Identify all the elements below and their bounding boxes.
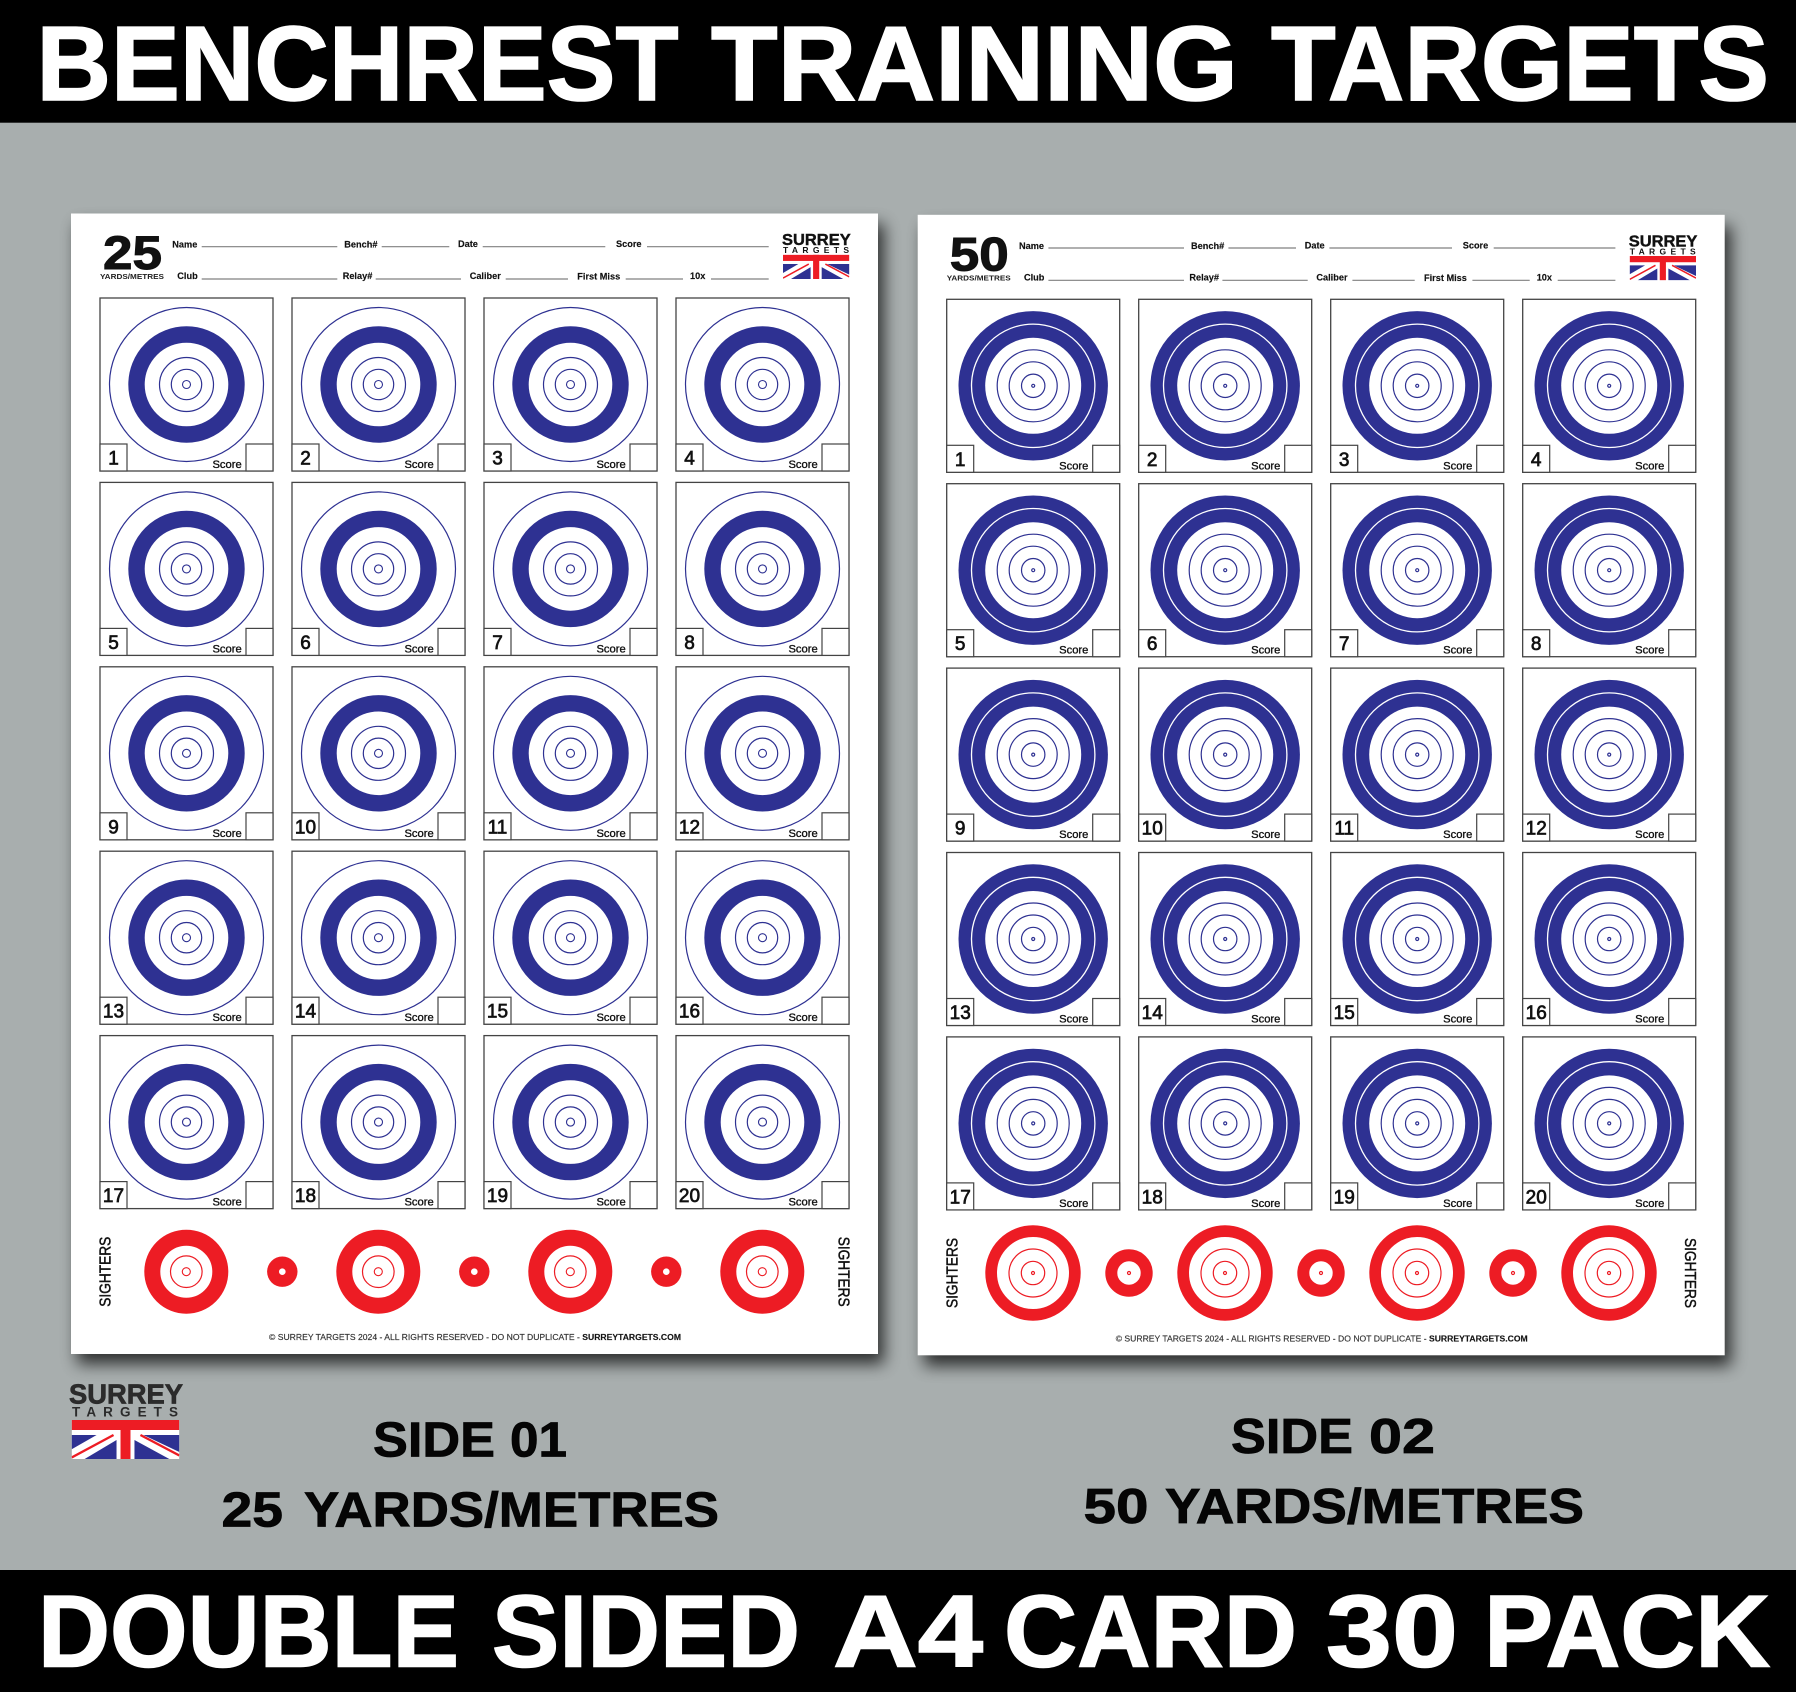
target 6 <box>1139 484 1312 657</box>
target 8: Score <box>1635 645 1664 657</box>
target 8 <box>1523 484 1696 657</box>
target 18 <box>1139 1037 1312 1210</box>
distance badge 25: YARDS/METRES <box>100 272 164 281</box>
footer banner: SIDED <box>492 1575 800 1689</box>
target 9: 9 <box>955 819 965 840</box>
form fields: Relay# <box>343 271 372 281</box>
target 12: Score <box>788 828 818 840</box>
target 8: 8 <box>1531 634 1541 655</box>
target 4: Score <box>788 459 818 471</box>
sighters row <box>944 1231 1698 1315</box>
form fields: Caliber <box>470 271 501 281</box>
form fields: Relay# <box>1189 272 1219 282</box>
target 10 <box>292 667 465 840</box>
target 18 <box>292 1036 465 1209</box>
target 4 <box>676 298 849 471</box>
title banner: BENCHREST <box>36 5 678 123</box>
target 6: 6 <box>300 633 311 654</box>
target 5: Score <box>1059 645 1088 657</box>
form fields: Caliber <box>1316 272 1348 282</box>
form fields: Date <box>1305 240 1325 250</box>
surrey targets logo small: SURREY <box>1629 233 1698 250</box>
target 9 <box>100 667 273 840</box>
target 9 <box>947 668 1120 841</box>
target 6: Score <box>404 643 434 655</box>
target 19: 19 <box>1334 1187 1355 1208</box>
target 8 <box>676 482 849 655</box>
distance badge 50: YARDS/METRES <box>947 273 1011 282</box>
surrey targets logo small: TARGETS <box>783 245 849 255</box>
target 13: Score <box>1059 1014 1088 1025</box>
form fields: Bench# <box>344 240 378 250</box>
target 20: 20 <box>1526 1187 1547 1208</box>
title banner: TARGETS <box>1271 5 1769 123</box>
target 10: 10 <box>295 817 316 838</box>
target 15: Score <box>596 1012 626 1024</box>
target 9: 9 <box>108 817 119 838</box>
sighters row: SIGHTERS <box>98 1237 115 1307</box>
target 3 <box>484 298 657 471</box>
form fields: 10x <box>1537 272 1553 282</box>
target 16: Score <box>788 1012 818 1024</box>
footer banner: CARD <box>1004 1575 1297 1689</box>
target 12: 12 <box>679 817 700 838</box>
target 13 <box>947 852 1120 1026</box>
form fields: Score <box>616 239 642 249</box>
target 15: 15 <box>487 1002 508 1023</box>
target 2 <box>1139 299 1312 472</box>
target 18: 18 <box>295 1186 316 1207</box>
target 11 <box>1331 668 1504 841</box>
caption side 02: YARDS/METRES <box>1165 1479 1584 1534</box>
target 10: Score <box>1251 829 1280 841</box>
footer banner: 30 <box>1326 1575 1458 1689</box>
sighters row: SIGHTERS <box>834 1237 851 1307</box>
surrey targets logo small: SURREY <box>782 232 851 249</box>
target 18: Score <box>404 1197 434 1209</box>
target 7: Score <box>1443 645 1472 657</box>
target 15: 15 <box>1334 1003 1355 1024</box>
target 17: Score <box>1059 1198 1088 1210</box>
target 15 <box>484 851 657 1024</box>
target 14: 14 <box>295 1002 316 1023</box>
target 5 <box>947 484 1120 657</box>
target 1: 1 <box>955 450 965 471</box>
target 11: 11 <box>488 817 507 838</box>
target 9: Score <box>1059 829 1088 841</box>
target 12: 12 <box>1526 819 1547 840</box>
caption side 01: YARDS/METRES <box>304 1483 719 1538</box>
caption side 01: SIDE <box>373 1412 495 1468</box>
surrey targets logo large: TARGETS <box>72 1405 178 1420</box>
target 13 <box>100 851 273 1024</box>
target 5: 5 <box>955 634 965 655</box>
target 12 <box>676 667 849 840</box>
target 10: Score <box>404 828 434 840</box>
target 16: 16 <box>679 1002 700 1023</box>
target 11: Score <box>1443 829 1472 841</box>
surrey targets logo large: SURREY <box>69 1378 183 1409</box>
target 13: Score <box>212 1012 242 1024</box>
footer banner <box>0 1570 1796 1692</box>
surrey targets logo small <box>782 232 851 279</box>
copyright line: © SURREY TARGETS 2024 - ALL RIGHTS RESERVED - DO NOT DUPLICATE - SURREYTARGETS.COM <box>1116 1334 1528 1343</box>
footer banner: PACK <box>1484 1575 1770 1689</box>
form fields: Date <box>458 239 478 249</box>
target 7 <box>1331 484 1504 657</box>
panel: side 02 target sheet <box>918 215 1725 1355</box>
target 12: Score <box>1635 829 1664 841</box>
panel: side 01 target sheet <box>71 214 878 1354</box>
form fields: Score <box>1463 240 1488 250</box>
form fields <box>172 239 769 282</box>
distance badge 50: 50 <box>950 227 1009 280</box>
target 7: Score <box>596 643 626 655</box>
footer banner: DOUBLE <box>38 1575 459 1689</box>
surrey targets logo small: TARGETS <box>1630 246 1696 256</box>
target 6 <box>292 482 465 655</box>
target 19: Score <box>596 1197 626 1209</box>
form fields: 10x <box>690 271 706 281</box>
caption side 01 <box>222 1412 719 1538</box>
target 2: Score <box>404 459 434 471</box>
target 14 <box>292 851 465 1024</box>
sighters row: SIGHTERS <box>944 1238 961 1308</box>
target 20 <box>676 1036 849 1209</box>
surrey targets logo small <box>1629 233 1698 280</box>
target 16 <box>1523 852 1696 1026</box>
target 20: Score <box>1635 1198 1664 1210</box>
target 6: Score <box>1251 645 1280 657</box>
form fields: Name <box>172 240 197 250</box>
surrey targets logo large <box>69 1378 183 1459</box>
target 3: Score <box>1443 460 1472 472</box>
target 4: 4 <box>1531 450 1542 471</box>
target 6: 6 <box>1147 634 1157 655</box>
title banner: TRAINING <box>711 5 1238 123</box>
target 5: Score <box>212 643 242 655</box>
sighters row <box>98 1237 851 1307</box>
target 17: 17 <box>950 1187 971 1208</box>
target 17: Score <box>212 1197 242 1209</box>
target 15 <box>1331 852 1504 1026</box>
target 3: 3 <box>492 448 503 470</box>
form fields: First Miss <box>1424 273 1467 283</box>
target 1 <box>100 298 273 471</box>
target 17 <box>100 1036 273 1209</box>
target 19 <box>1331 1037 1504 1210</box>
target 15: Score <box>1443 1014 1472 1025</box>
target 2 <box>292 298 465 471</box>
copyright line: © SURREY TARGETS 2024 - ALL RIGHTS RESERVED - DO NOT DUPLICATE - SURREYTARGETS.COM <box>269 1333 681 1342</box>
caption side 01: 25 <box>222 1483 283 1538</box>
caption side 02: SIDE <box>1231 1409 1353 1464</box>
target 16: Score <box>1635 1014 1664 1025</box>
target 11: Score <box>596 828 626 840</box>
target 1: 1 <box>108 448 119 470</box>
target 4: Score <box>1635 460 1664 472</box>
caption side 02 <box>1084 1409 1584 1534</box>
form fields <box>1019 240 1615 283</box>
target 18: Score <box>1251 1198 1280 1210</box>
target 7 <box>484 482 657 655</box>
target 2: Score <box>1251 460 1280 472</box>
target 1 <box>947 299 1120 472</box>
target 3: 3 <box>1339 450 1349 471</box>
target 16 <box>676 851 849 1024</box>
target 12 <box>1523 668 1696 841</box>
target 5 <box>100 482 273 655</box>
target 10: 10 <box>1142 819 1163 840</box>
target 11: 11 <box>1334 819 1354 840</box>
target 17: 17 <box>103 1186 124 1207</box>
target 2: 2 <box>1147 450 1157 471</box>
caption side 02: 50 <box>1084 1479 1148 1534</box>
target 13: 13 <box>950 1003 971 1024</box>
target 20: 20 <box>679 1186 700 1207</box>
target 17 <box>947 1037 1120 1210</box>
target 4 <box>1523 299 1696 472</box>
form fields: Club <box>1024 272 1045 282</box>
target 14 <box>1139 852 1312 1026</box>
target 19 <box>484 1036 657 1209</box>
target 19: 19 <box>487 1186 508 1207</box>
target 5: 5 <box>108 633 119 654</box>
target 8: Score <box>788 643 818 655</box>
form fields: Bench# <box>1191 241 1224 251</box>
target 14: 14 <box>1142 1003 1163 1024</box>
target 7: 7 <box>492 633 503 654</box>
distance badge 25: 25 <box>103 226 162 279</box>
target 20 <box>1523 1037 1696 1210</box>
target 1: Score <box>212 459 242 471</box>
target 18: 18 <box>1142 1187 1163 1208</box>
target 1: Score <box>1059 460 1088 472</box>
target 9: Score <box>212 828 242 840</box>
footer banner: A4 <box>833 1575 983 1689</box>
target 4: 4 <box>684 448 695 470</box>
target 14: Score <box>404 1012 434 1024</box>
target 8: 8 <box>684 633 695 654</box>
panel shadow right <box>924 226 1731 1366</box>
target 2: 2 <box>300 448 311 470</box>
target 3 <box>1331 299 1504 472</box>
target 20: Score <box>788 1197 818 1209</box>
sighters row: SIGHTERS <box>1681 1238 1698 1308</box>
caption side 02: 02 <box>1369 1409 1435 1464</box>
title banner <box>0 0 1796 123</box>
target 10 <box>1139 668 1312 841</box>
target 16: 16 <box>1526 1003 1547 1024</box>
panel shadow left <box>77 224 884 1364</box>
target 3: Score <box>596 459 626 471</box>
target 7: 7 <box>1339 634 1349 655</box>
caption side 01: 01 <box>510 1412 567 1468</box>
target 19: Score <box>1443 1198 1472 1210</box>
form fields: Name <box>1019 241 1044 251</box>
target 14: Score <box>1251 1014 1280 1025</box>
form fields: First Miss <box>577 272 620 282</box>
target 13: 13 <box>103 1002 124 1023</box>
form fields: Club <box>177 271 198 281</box>
target 11 <box>484 667 657 840</box>
